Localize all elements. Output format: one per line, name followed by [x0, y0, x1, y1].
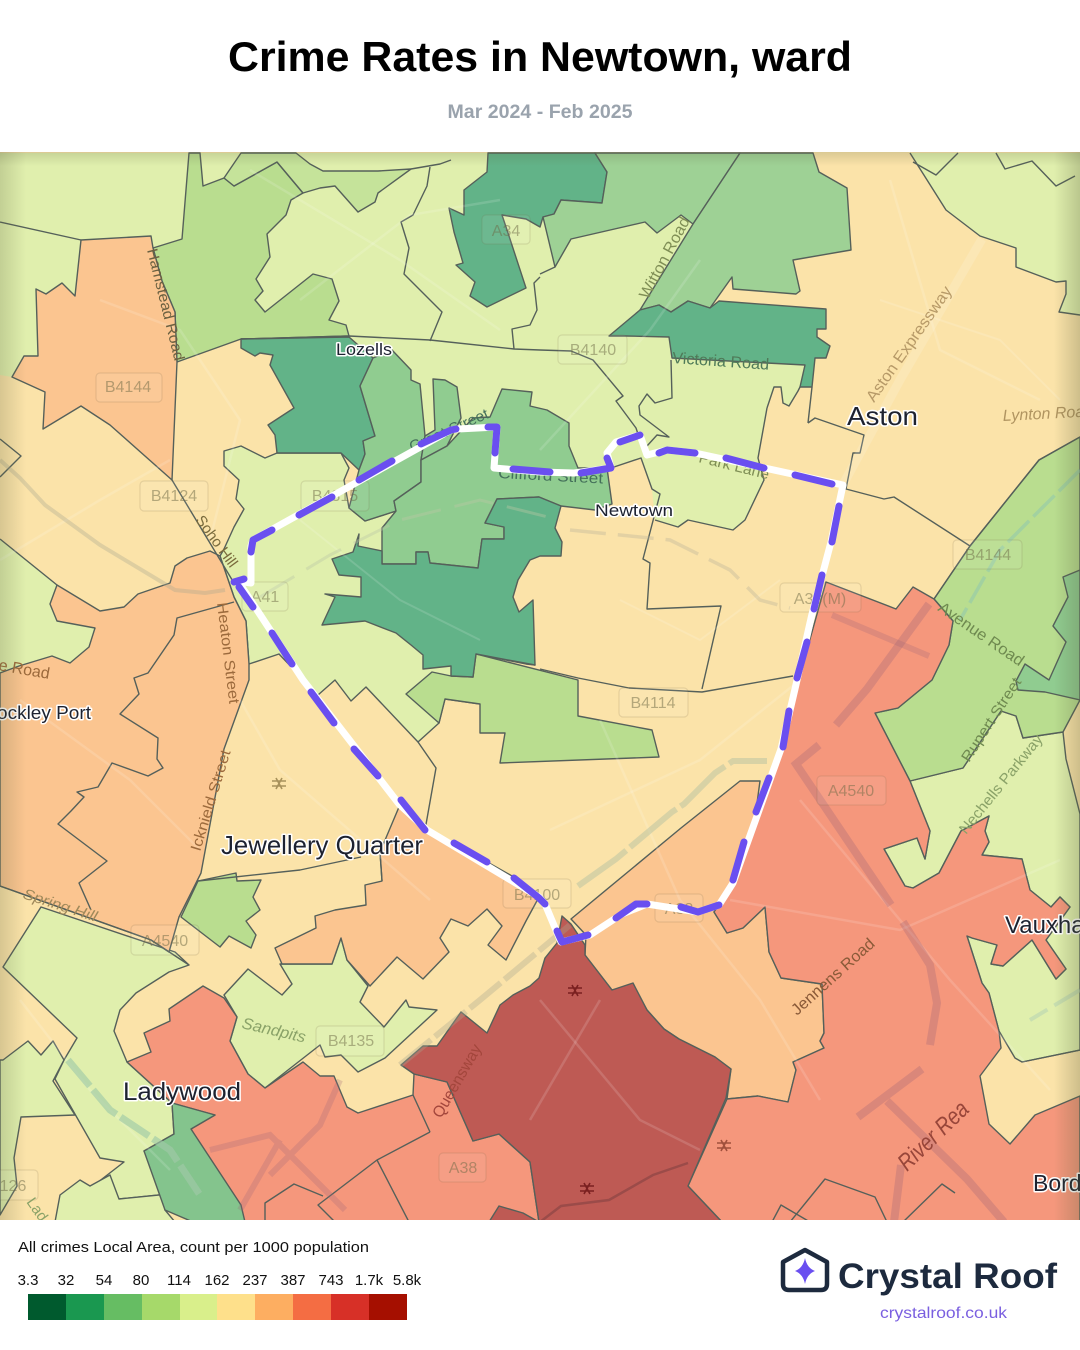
area: far-left lime — [0, 539, 95, 673]
area: top-left lime — [0, 153, 189, 248]
area: top-right lime — [910, 153, 1080, 315]
logo wordmark: Crystal Roof — [838, 1257, 1057, 1296]
road and street labels: Victoria Road — [672, 350, 770, 374]
area: east lime Nechells — [884, 711, 1080, 1062]
road and street labels: Icknield Street — [188, 747, 235, 853]
road shields: B4124 — [151, 488, 197, 505]
area: light green north-west — [153, 153, 349, 362]
road network — [0, 170, 1060, 1170]
road and street labels: Soho Hill — [192, 512, 241, 571]
place labels: Newtown — [595, 501, 673, 520]
legend tick labels: 114 — [167, 1272, 191, 1289]
road shields: B4144 — [965, 547, 1011, 564]
legend tick labels: 237 — [242, 1272, 268, 1289]
road and street labels: Heaton Street — [213, 601, 242, 706]
area: mid green east — [1016, 570, 1080, 700]
area: dark green Victoria Road — [609, 301, 830, 387]
road and street labels: Jennens Road — [788, 935, 878, 1019]
area: dark red city centre — [401, 916, 731, 1222]
road shields: B4315 — [312, 488, 358, 505]
area: west lime — [220, 446, 535, 742]
legend tick labels: 1.7k — [355, 1272, 384, 1289]
area: dark green Newtown core — [322, 497, 562, 677]
area: salmon east — [688, 582, 1080, 1222]
legend tick labels: 54 — [96, 1272, 112, 1289]
legend tick labels: 162 — [204, 1272, 230, 1289]
station icons — [272, 778, 731, 1194]
area: orange west Hamstead — [12, 236, 177, 480]
area: south-west lime — [3, 907, 189, 1199]
area: dark green Lozells — [241, 337, 375, 470]
area: mid green strip — [421, 379, 461, 460]
area: light green north — [224, 153, 411, 212]
road shields: B4144 — [105, 379, 151, 396]
legend tick labels: 3.3 — [18, 1272, 38, 1289]
place labels — [0, 340, 1080, 1196]
road and street labels: Rupert Street — [958, 674, 1026, 765]
area: orange Jewellery Quarter — [275, 807, 539, 986]
road shields: A4540 — [142, 933, 188, 950]
area: salmon Ladywood — [127, 986, 539, 1222]
subtitle: date range: Mar 2024 - Feb 2025 — [448, 102, 633, 123]
road shields: B4135 — [328, 1033, 374, 1050]
area: green Ladywood — [144, 1103, 245, 1222]
logo url: crystalroof.co.uk — [880, 1305, 1008, 1322]
road and street labels: Sandpits — [240, 1015, 307, 1047]
road shields: A38(M) — [794, 591, 846, 608]
road and street labels — [0, 214, 1080, 1225]
icon: house with star — [783, 1250, 827, 1290]
road shields: B4100 — [514, 887, 560, 904]
place labels: Jewellery Quarter — [221, 830, 423, 860]
title: Crime Rates in Newtown, ward — [228, 33, 852, 80]
area: mid green north — [543, 153, 740, 267]
area: mid green east of Lozells — [349, 350, 425, 521]
road and street labels: River Rea — [892, 1096, 974, 1176]
area: orange west Hockley — [0, 551, 249, 952]
place labels: Lozells — [336, 340, 392, 359]
choropleth map — [0, 152, 1080, 1225]
area: mid green Newtown core — [382, 389, 612, 568]
logo: Crystal Roof — [783, 1250, 1057, 1322]
road and street labels: Witton Road — [637, 214, 694, 302]
area: top-centre lime — [177, 153, 805, 530]
road and street labels: Nechells Parkway — [956, 731, 1047, 838]
road and street labels: Aston Expressway — [863, 283, 956, 405]
legend tick labels — [18, 1272, 422, 1289]
area: light green Jewellery Quarter — [181, 873, 261, 948]
legend tick labels: 80 — [133, 1272, 149, 1289]
road shields: A41 — [251, 589, 279, 606]
road shields: A4540 — [828, 783, 874, 800]
legend colour scale — [28, 1294, 407, 1320]
road and street labels: Park Lane — [697, 449, 771, 483]
road and street labels: Avenue Road — [935, 599, 1027, 670]
railway and canal lines — [0, 460, 1080, 1222]
road and street labels: Lad — [23, 1195, 51, 1225]
ward boundary: white line — [238, 427, 843, 942]
road shields — [0, 215, 1022, 1200]
place labels: Ladywood — [123, 1078, 241, 1106]
legend — [18, 1239, 422, 1320]
area: light green south of ward — [406, 654, 659, 763]
map edge vignette — [0, 152, 1080, 1220]
road and street labels: Spring Hill — [21, 886, 100, 926]
road and street labels: Queensway — [430, 1041, 485, 1121]
road and street labels: Hamstead Road — [143, 247, 187, 363]
road shields: A34 — [492, 223, 520, 240]
road shields: A38 — [665, 901, 693, 918]
road shields: B4114 — [630, 695, 676, 712]
area: Sandpits lime — [224, 938, 437, 1088]
legend tick labels: 32 — [58, 1272, 74, 1289]
road shields: 126 — [0, 1178, 26, 1195]
legend tick labels: 5.8k — [393, 1272, 422, 1289]
legend tick labels: 743 — [318, 1272, 344, 1289]
area: orange south of ward — [571, 781, 824, 1102]
place labels: Aston — [847, 401, 918, 431]
area: light green east — [875, 437, 1080, 781]
boundary lines — [0, 153, 1080, 1222]
ward boundary: purple dashes — [234, 427, 839, 942]
legend title: All crimes Local Area, count per 1000 population — [18, 1239, 369, 1256]
road shields: A38 — [449, 1160, 477, 1177]
road and street labels: Great Street — [407, 405, 492, 456]
road and street labels: Clifford Street — [498, 465, 604, 488]
area: dark green A34 — [449, 153, 607, 307]
legend tick labels: 387 — [280, 1272, 306, 1289]
area: mid green north-east — [640, 153, 851, 312]
road shields: B4140 — [570, 342, 616, 359]
